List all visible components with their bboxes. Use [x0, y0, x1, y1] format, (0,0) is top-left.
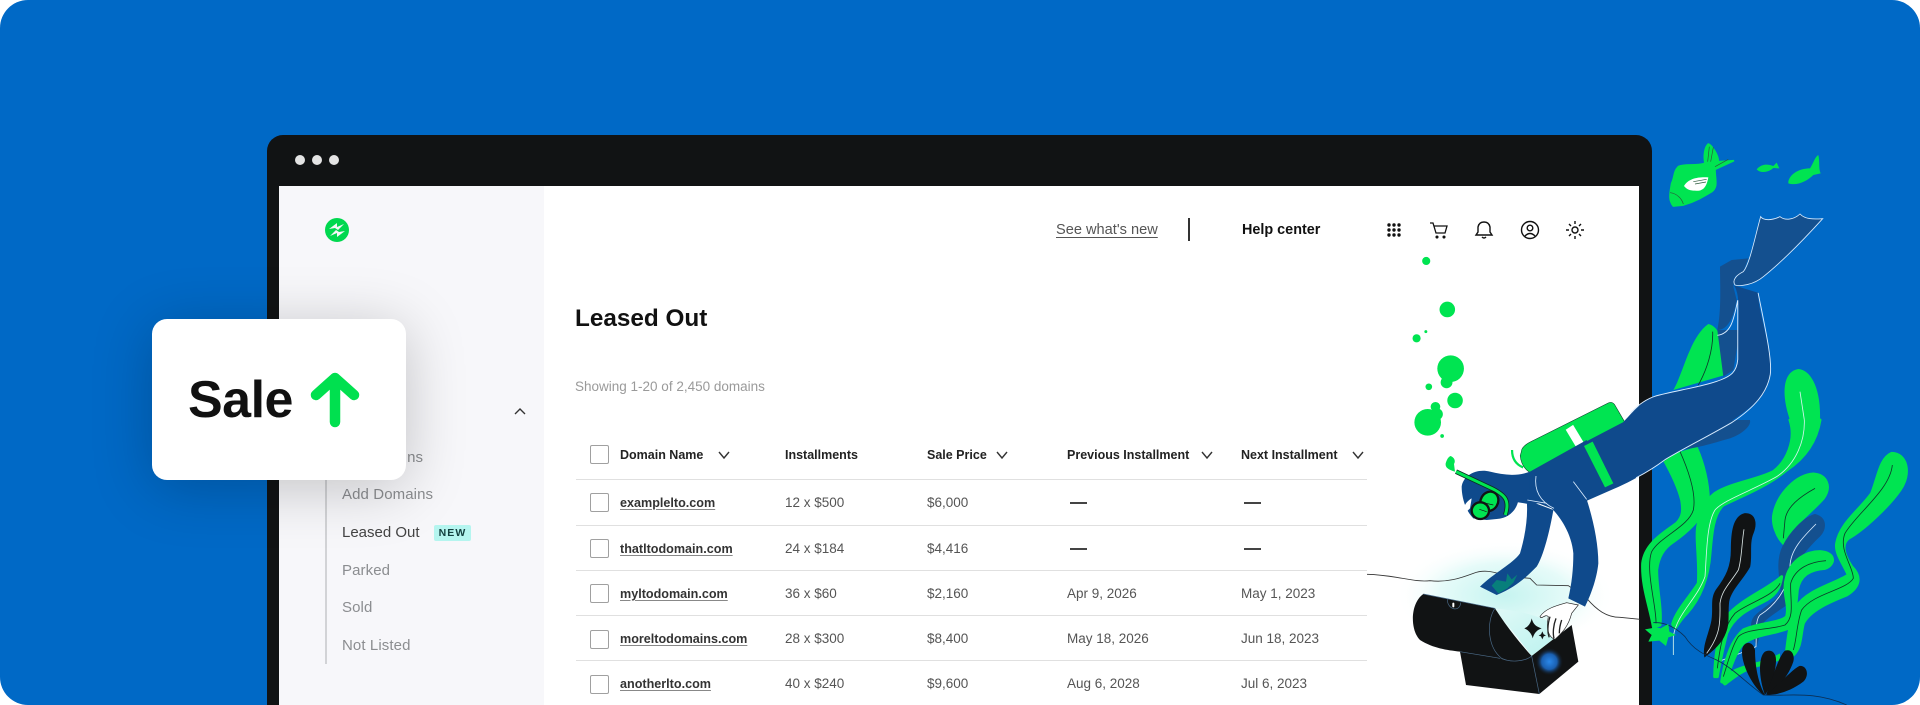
starfish	[1645, 624, 1676, 646]
page content area	[279, 186, 1639, 705]
suit highlights	[1536, 293, 1771, 478]
table header row: Previous Installment	[1067, 448, 1189, 462]
table row 1: 12 x $500	[785, 495, 844, 510]
kelp: navy frond	[1717, 515, 1824, 675]
kelp: top of central frond	[1785, 369, 1820, 420]
table row 5: $9,600	[927, 676, 968, 691]
table row 2: thatltodomain.com	[620, 542, 733, 556]
ear strap	[1463, 498, 1472, 512]
sidebar item: Parked: Parked	[342, 562, 390, 579]
chest latch keyhole	[1452, 603, 1454, 607]
kelp: long central frond	[1673, 420, 1820, 655]
diver upper body	[1413, 440, 1613, 694]
chest lid	[1413, 594, 1532, 661]
diver body and leg	[1503, 285, 1771, 504]
fish large	[1670, 144, 1734, 206]
sidebar collapse chevron	[514, 408, 526, 414]
kelp: leaf mid	[1773, 474, 1827, 544]
header divider	[1188, 218, 1190, 241]
table header row: Next Installment	[1241, 448, 1338, 462]
leg shadow	[1673, 420, 1750, 450]
sparkle stars	[1524, 618, 1546, 639]
table row 3: myltodomain.com	[620, 587, 728, 601]
chest glow	[1395, 535, 1615, 645]
window control dots	[295, 155, 339, 165]
sidebar item: Leased Out: Leased Out	[342, 524, 420, 541]
table row 4	[576, 630, 1367, 661]
table row 5: anotherlto.com	[620, 677, 711, 691]
left arm	[1480, 500, 1553, 595]
snorkel	[1456, 472, 1507, 515]
diver air tank	[1512, 402, 1625, 476]
table row 2: 24 x $184	[785, 541, 844, 556]
back leg	[1717, 258, 1748, 377]
browser window frame	[267, 135, 1652, 705]
callout text: Sale	[188, 371, 293, 429]
header icons	[1387, 220, 1584, 240]
rising bubbles	[1413, 257, 1464, 438]
kelp: leaf behind leg	[1673, 324, 1725, 390]
suit stripe	[1584, 442, 1613, 487]
table row 4: May 18, 2026	[1067, 631, 1149, 646]
finger nails	[1548, 617, 1562, 638]
diver fin	[1734, 214, 1823, 286]
table row 2	[576, 539, 1367, 571]
table row 5: 40 x $240	[785, 676, 844, 691]
icon: grid	[1387, 223, 1401, 237]
kelp: black frond	[1705, 514, 1755, 656]
chest opening glow	[1495, 608, 1572, 656]
table row 3: May 1, 2023	[1241, 586, 1315, 601]
sidebar tree line	[325, 476, 326, 664]
results count: Showing 1-20 of 2,450 domains	[575, 379, 765, 394]
snorkel tip bubble	[1446, 456, 1455, 472]
sleeve speckle	[1492, 573, 1517, 593]
kelp: curling frond	[1722, 552, 1833, 683]
table row 3	[576, 584, 1367, 616]
sidebar item: Add Domains: Add Domains	[342, 486, 433, 503]
kelp: left frond	[1643, 448, 1708, 627]
seabed line left	[1367, 571, 1640, 619]
table row 2: $4,416	[927, 541, 968, 556]
icon: bell	[1476, 222, 1492, 238]
panel: sidebar	[279, 186, 544, 705]
table row 4: moreltodomains.com	[620, 632, 747, 646]
table row 3: $2,160	[927, 586, 968, 601]
right arm	[1530, 440, 1598, 607]
head	[1462, 471, 1530, 520]
table row 1: $6,000	[927, 495, 968, 510]
table row 5: Aug 6, 2028	[1067, 676, 1140, 691]
NEW badge	[434, 525, 471, 541]
table row 3: Apr 9, 2026	[1067, 586, 1137, 601]
logo icon	[325, 218, 349, 242]
kelp plants lower	[1643, 420, 1906, 705]
blue light burst	[1535, 648, 1563, 676]
icon: brightness	[1566, 221, 1584, 239]
fish medium	[1788, 155, 1821, 184]
link: Help center: Help center	[1242, 222, 1320, 238]
icon: cart	[1430, 223, 1447, 238]
kelp: diagonal frond	[1715, 577, 1782, 677]
table header row	[576, 445, 1367, 480]
mask	[1472, 488, 1502, 519]
table row 4: $8,400	[927, 631, 968, 646]
sea anemone	[1742, 643, 1807, 695]
table row 4: Jun 18, 2023	[1241, 631, 1319, 646]
callout: Sale card	[152, 319, 406, 480]
table row 5: Jul 6, 2023	[1241, 676, 1307, 691]
kelp: right long frond	[1787, 453, 1906, 655]
seabed line right	[1653, 623, 1847, 705]
kelp: bottom frond	[1723, 653, 1780, 686]
chest edges	[1423, 594, 1539, 694]
upper leg and fish	[1670, 144, 1823, 420]
table header row: Sale Price	[927, 448, 987, 462]
icon: up arrow	[310, 372, 360, 428]
table header row: Installments	[785, 448, 858, 462]
icon: user	[1522, 222, 1538, 238]
table row 5	[590, 675, 1307, 694]
table row 4: 28 x $300	[785, 631, 844, 646]
table row 1: examplelto.com	[620, 496, 715, 510]
sidebar item: All Domains: All Domains	[342, 449, 423, 466]
NEW badge: NEW	[439, 527, 466, 539]
suit seams	[1527, 476, 1587, 508]
chest box	[1460, 625, 1578, 694]
table header row: Domain Name	[620, 448, 703, 462]
fish small	[1757, 163, 1779, 172]
sidebar item: Not Listed: Not Listed	[342, 637, 411, 654]
diver hand	[1540, 603, 1578, 639]
table row 3: 36 x $60	[785, 586, 837, 601]
sidebar item: Sold: Sold	[342, 599, 372, 616]
heading: Leased Out: Leased Out	[575, 305, 707, 332]
table row 1	[576, 493, 1367, 526]
link: See what's new: See what's new	[1056, 222, 1158, 238]
